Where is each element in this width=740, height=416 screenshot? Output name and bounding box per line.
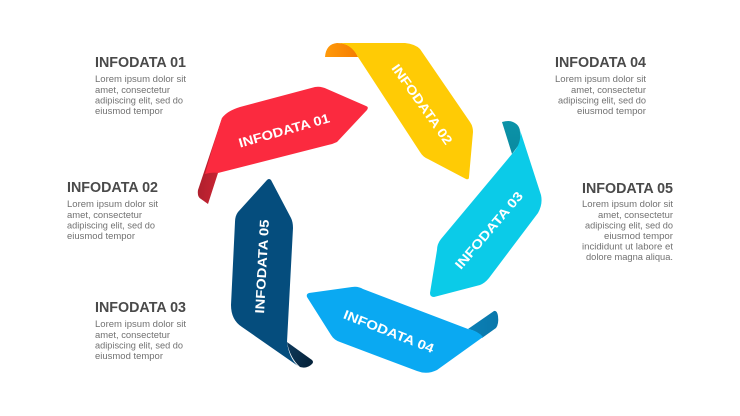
body: infodata 05: dolore magna aliqua. [586,252,673,263]
arrow body: blue ribbon [307,287,483,373]
body: infodata 04: eiusmod tempor [577,106,647,117]
fold: navy ribbon [287,342,313,368]
body: infodata 03: eiusmod tempor [95,351,164,362]
label: infodata 05: INFODATA 05 [252,219,272,314]
arrow body: yellow ribbon [337,43,473,179]
body: infodata 04: Lorem ipsum dolor sit [555,74,646,85]
body: infodata 01: amet, consectetur [95,85,171,96]
body: infodata 03: adipiscing elit, sed do [95,340,183,352]
body: infodata 05: adipiscing elit, sed do [585,220,673,232]
body: infodata 02: Lorem ipsum dolor sit [67,199,158,210]
fold: red ribbon [198,118,222,204]
label: infodata 03: INFODATA 03 [452,189,526,272]
body: infodata 05: Lorem ipsum dolor sit [582,199,673,210]
label: infodata 02: INFODATA 02 [389,61,456,147]
body: infodata 05: incididunt ut labore et [582,242,673,252]
heading: infodata 04: INFODATA 04 [555,55,646,71]
arrow body: red ribbon [205,87,368,174]
body: infodata 05: eiusmod tempor [604,231,674,242]
arrow body: cyan ribbon [430,130,542,297]
ribbon: infodata 05 (navy) [231,179,313,368]
body: infodata 04: adipiscing elit, sed do [558,96,646,106]
body: infodata 02: eiusmod tempor [67,231,136,242]
body: infodata 02: adipiscing elit, sed do [67,220,155,232]
body: infodata 02 [67,199,158,242]
heading: infodata 03: INFODATA 03 [95,300,186,316]
arrow body: navy ribbon [231,179,298,366]
text block: infodata 03 [95,300,186,362]
body: infodata 03: amet, consectetur [95,330,171,341]
body: infodata 03: Lorem ipsum dolor sit [95,319,186,330]
heading: infodata 02: INFODATA 02 [67,180,158,196]
label: infodata 01: INFODATA 01 [237,110,331,150]
fold: yellow ribbon [325,43,358,57]
text block: infodata 05 [582,181,674,263]
body: infodata 01: adipiscing elit, sed do [95,96,183,106]
body: infodata 05 [582,199,674,263]
text block: infodata 02 [67,180,158,242]
heading: infodata 05: INFODATA 05 [582,181,673,197]
body: infodata 03 [95,319,186,362]
body: infodata 02: amet, consectetur [67,210,143,221]
fold: cyan ribbon [502,121,521,154]
heading: infodata 01: INFODATA 01 [95,55,186,71]
label: infodata 04: INFODATA 04 [341,307,437,356]
body: infodata 04 [555,74,647,117]
ribbon: infodata 04 (blue) [307,287,498,373]
ribbon: infodata 02 (yellow) [325,43,473,179]
body: infodata 04: amet, consectetur [571,85,647,96]
ribbon: infodata 01 (red) [198,87,368,204]
ribbon: infodata 03 (cyan) [430,121,542,297]
body: infodata 01 [95,74,186,117]
text block: infodata 04 [555,55,647,117]
body: infodata 01: eiusmod tempor [95,106,164,117]
text block: infodata 01 [95,55,186,117]
fold: blue ribbon [468,311,498,338]
body: infodata 01: Lorem ipsum dolor sit [95,74,186,85]
body: infodata 05: amet, consectetur [598,210,674,221]
